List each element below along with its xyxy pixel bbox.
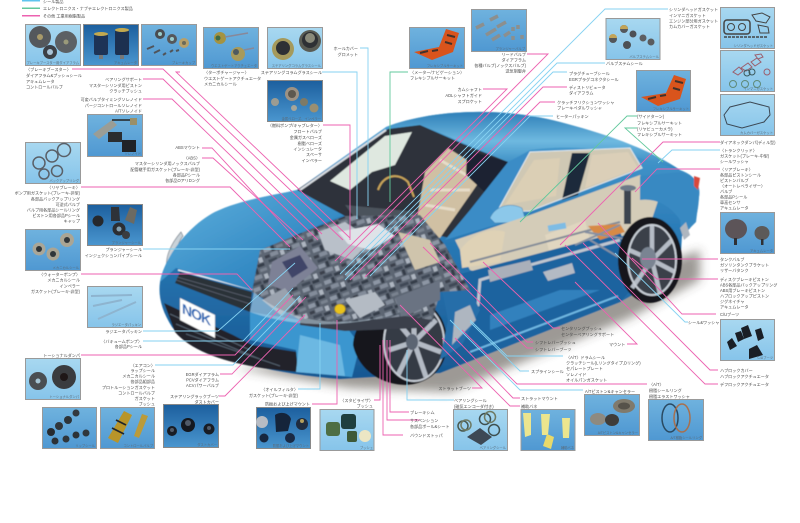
labels: bottom centre: 樹脂シールリング: [649, 387, 682, 393]
lower black bumper: [164, 303, 300, 372]
photo: steering column seal: ステアリングコラムグラスシール: [272, 63, 322, 68]
labels: top left: 〈ブレーキブースター〉: [26, 66, 71, 72]
labels: lower middle: シフトレバーブーツ: [535, 346, 572, 352]
photo: fuel pump bellows: [268, 80, 322, 122]
a-pillar: [445, 151, 530, 240]
labels: upper right: (リヤビューカメラ): [637, 126, 673, 132]
labels: bottom centre: バウンドストッパ: [410, 432, 443, 438]
photo: cam cover gasket: カムカバーガスケット: [740, 130, 773, 135]
labels: upper right: シリンダヘッドガスケット: [669, 6, 718, 12]
photo: bearing seal: [454, 410, 508, 450]
labels: upper right: シールワッシャ: [720, 159, 749, 164]
labels: bottom left: プロトルーションガスケット: [102, 384, 155, 390]
photo: wastegate actuator: ウエストゲートアクチュエータ: [211, 63, 257, 68]
labels: left column: 〈バキュームポンプ〉: [101, 338, 142, 344]
photo: meter flexible circuit: フレキシブルサーキット: [427, 63, 463, 68]
labels: upper right: カムカバーガスケット: [669, 23, 710, 29]
photo: AT piston canceller: A/Tピストン&キャンセラー: [598, 430, 638, 435]
photo: valve stem seal: バルブステムシール: [629, 54, 660, 59]
labels: upper right: 〈リアブレーキ〉: [720, 166, 753, 172]
photo: backup rings: バックアップリング: [49, 178, 80, 183]
labels: upper right: ディストリビュータ: [569, 84, 606, 90]
labels: bottom left: ステアリングラックブーツ: [170, 393, 219, 399]
grille: [175, 272, 252, 312]
photo: CV boots: C/Uブーツ: [757, 355, 773, 360]
labels: bottom left: 〈スタビライザ〉: [340, 397, 373, 403]
labels: left column: 可逆式バルブ: [55, 201, 80, 207]
labels: top centre: カムシャフト: [457, 87, 482, 92]
labels: lower middle: ソレノイド: [566, 372, 586, 377]
labels: left column: ポンプ用ガスケット(ブレーキ-非型): [15, 190, 81, 196]
photo: valve stem seal: [606, 18, 660, 60]
labels: ABS: 各部品Pシール: [173, 172, 200, 178]
door mirror: [490, 205, 526, 223]
photo: accumulator: [84, 24, 138, 66]
labels: bottom centre: ストラットマウント: [521, 395, 558, 401]
labels: left column: バルブ用各部品シールリング: [27, 206, 80, 212]
labels: upper right: ダイアフラム: [569, 90, 593, 96]
labels: upper right: EGRプラグコネクタシール: [569, 76, 619, 82]
photo: cylinder head gasket: シリンダヘッドガスケット: [733, 43, 773, 48]
labels: upper right: (サイドターン): [637, 113, 665, 119]
labels: left column: キャップ: [64, 218, 81, 224]
labels: left column: 各部品Pシール: [115, 343, 142, 349]
labels: top left: パージコントロールソレノイド: [85, 103, 142, 108]
labels: bottom left: ガスケット(ブレーキ-非型): [249, 392, 299, 398]
labels: upper right: フレキシブルサーキット: [637, 120, 682, 126]
labels: ABS: 配管継手用ガスケット(ブレーキ-非型): [130, 166, 201, 172]
labels: lower right: [688, 256, 777, 387]
photo: accumulator: アキュムレータ: [114, 60, 137, 65]
labels: bottom centre: (磁気エンコーダ付き): [454, 403, 494, 409]
photo: plunger tube seal: プランジャーシール: [112, 240, 142, 245]
labels: ABS: 各部品OアリDング: [165, 177, 200, 183]
labels: top centre: ダイアフラム: [502, 56, 526, 62]
windshield and cabin: [297, 125, 508, 238]
photo: flexible circuit: フレキシブルサーキット: [653, 106, 689, 111]
labels: upper right: ガスケット(ブレーキ-中型): [720, 152, 770, 158]
labels: bottom left: メカニカルシール: [122, 374, 155, 378]
photo: brake cups: ブレーキカップ: [172, 60, 196, 65]
labels: bottom left: 各部品組部品: [130, 378, 155, 384]
labels: upper right: プラグチューブシール: [569, 70, 610, 76]
photo: AT resin seal rings: A/T樹脂シールリング: [670, 435, 703, 440]
labels: upper right: クラッチフリクションワッシャ: [557, 99, 614, 105]
photo: CV boots: [720, 320, 774, 360]
photo: dust cover: [164, 404, 218, 448]
labels: bottom left: ガスケット: [135, 395, 155, 401]
lower interior: [455, 175, 660, 280]
labels: upper right: バルブステムシール: [606, 60, 643, 66]
labels: lower right: ABS用ブレーキピストン: [720, 287, 765, 293]
labels: upper right: 〈トランクリッド〉: [720, 147, 757, 153]
labels: upper right: [556, 6, 776, 210]
photo: meter flexible circuit: [410, 28, 464, 68]
photo: accumulator right: アキュムレータ: [750, 248, 773, 253]
leader lines: pink: [72, 54, 720, 435]
leader lines: blue: [143, 9, 720, 400]
leader lines: green: [390, 72, 663, 222]
labels: left column: メカニカルシール: [47, 278, 80, 282]
photo: steering column seal: [268, 28, 322, 68]
labels: top centre: フレキシブルサーキット: [410, 74, 455, 80]
photo: torsional damper: トーショナルダンパ: [49, 394, 80, 399]
labels: bottom centre: 補助バネ: [521, 403, 537, 409]
front bumper panel: [250, 312, 360, 377]
photo: plunger valve parts: [472, 10, 526, 52]
labels: lower right: ハブロックアクチュエータ: [720, 373, 769, 379]
labels: left column: ガスケット(ブレーキ-非型): [31, 288, 81, 294]
front wheel arch / firewall panel: [440, 280, 480, 360]
labels: left column: インペラー: [60, 282, 80, 288]
labels: ABS: [130, 144, 201, 183]
labels: lower right: シール&ワッシャ: [688, 320, 719, 325]
labels: bottom centre: 〈A/T〉: [649, 382, 664, 387]
labels: bottom centre: サスペンション: [410, 417, 438, 423]
photo: control valve: [100, 408, 154, 448]
labels: bottom left: EGRダイアフラム: [186, 371, 219, 377]
labels: upper right: ピストンバルブ: [720, 177, 749, 183]
labels: upper right: ダイアネックダンパ(ディル型): [720, 139, 776, 145]
labels: lower middle: クラッチシール(Lリングタイプ,Dリング): [566, 360, 641, 366]
photo: backup rings: [26, 142, 80, 184]
labels: top centre: ホールカバー: [334, 46, 358, 51]
labels: upper right: ブレーキペダルワッシャ: [557, 104, 602, 110]
labels: bottom centre: 各部品ボール&シート: [410, 423, 450, 429]
photo: bump spring: 補助バネ: [561, 445, 575, 450]
labels: bottom left: ダストカバー: [194, 398, 219, 404]
labels: bottom left: ラップシール: [130, 367, 155, 373]
ground shadow: [235, 250, 700, 392]
labels: bottom centre: ブレーキシム: [410, 409, 435, 415]
door window: [497, 148, 642, 212]
labels: bottom left: [102, 363, 373, 408]
labels: bottom left: コントロールバルブ: [118, 390, 155, 396]
labels: top left: アキュムレータ: [26, 78, 55, 84]
labels: lower right: ハブロックカバー: [720, 367, 753, 373]
labels: top left: ウエストゲートアクチュエータ: [204, 75, 261, 81]
labels: lower middle: マウント: [609, 341, 625, 347]
photo: cylinder head gasket: [720, 8, 774, 48]
photo: engine mount: [256, 408, 310, 448]
labels: top left: ダイアフラム&プッシュシール: [26, 72, 82, 78]
photo: bush: [320, 410, 374, 450]
labels: upper right: 車高センサ: [720, 199, 740, 205]
labels: top centre: スペーサ: [306, 151, 322, 157]
front seats: [415, 148, 486, 238]
labels: left column: 〈リヤブレーキ〉: [47, 184, 80, 190]
labels: left column: プランジャーシール: [105, 246, 142, 252]
labels: bottom left: 〈オイルフィルタ〉: [261, 386, 298, 392]
exhaust system: [455, 222, 620, 312]
labels: top left: ベアリングサポート: [105, 76, 142, 82]
labels: lower middle: [531, 325, 641, 382]
labels: top centre: フロートバルブ: [293, 128, 322, 134]
labels: upper right: 各部品ピストンシール: [720, 172, 761, 178]
labels: lower right: C/Uブーツ: [720, 311, 739, 317]
labels: bottom left: ブッシュ: [357, 402, 373, 408]
photo: AT piston canceller: [584, 394, 640, 436]
labels: top centre: 〈燃料ポンプ/キャブレター〉: [268, 122, 322, 128]
labels: top left: コントロールバルブ: [26, 84, 63, 90]
car body: [160, 112, 699, 379]
labels: lower middle: センターベアリングサポート: [561, 331, 614, 337]
labels: top centre: 各種バルブ(ノックスバルブ): [474, 62, 527, 68]
labels: top centre: 樹脂ベローズ: [298, 140, 322, 146]
labels: top centre: ADLシャフトガイド: [445, 92, 482, 98]
rear wheel: [618, 217, 682, 303]
labels: upper right: エンジン部分用ガスケット: [669, 18, 718, 24]
labels: upper right: 各部品Pシール: [720, 194, 747, 200]
labels: top left: A/Tソレノイド: [115, 108, 142, 114]
labels: bottom left: ブッシュ: [139, 400, 155, 406]
labels: top centre: 送気制御弁: [506, 68, 526, 74]
labels: ABS: 〈ABS〉: [184, 156, 200, 160]
labels: left column: ラジエータパッキン: [105, 328, 142, 334]
photo: brake booster diaphragm: ブレーキブースター用ダイアフラム: [26, 60, 80, 65]
labels: lower right: アキュムレータ: [720, 304, 749, 310]
fender swoosh: [250, 292, 405, 324]
engine bay: [252, 215, 470, 331]
photo: torsional damper: [26, 358, 80, 400]
front wheel: [353, 299, 447, 385]
photo: cam cover gasket: [720, 94, 774, 136]
labels: upper right: インマニガスケット: [669, 12, 706, 18]
labels: left column: 各部品バックアップリング: [31, 196, 80, 202]
labels: top left: メカニカルシール: [204, 82, 237, 86]
labels: left column: トーショナルダンパ: [43, 352, 80, 358]
photo: lip seals: リップシール: [75, 443, 96, 448]
labels: top left: 可変バルブタイミングソレノイド: [81, 96, 142, 102]
labels: lower middle: センタリングブッシュ: [561, 325, 602, 331]
labels: lower middle: 〈A/T〉ドラムシール: [566, 354, 605, 360]
photo: dust cover: ダストカバー: [197, 442, 217, 447]
labels: upper right: フレキシブルサーキット: [637, 131, 682, 137]
photo: radiator packing: ラジエータパッキン: [111, 322, 142, 327]
labels: lower right: ディスクブレーキピストン: [720, 276, 769, 282]
labels: left column: ピストン用各部品Pシール: [32, 212, 80, 218]
photo: mechanical seal: メカニカルシール: [53, 265, 80, 270]
legend: [22, 0, 133, 18]
photo: flexible circuit: [636, 70, 690, 112]
photo: bump spring: [521, 410, 575, 450]
labels: ABS: ABSマウント: [175, 144, 200, 150]
labels: left column: 〈ウォーターポンプ〉: [39, 271, 80, 277]
photo: bush: ブッシュ: [360, 445, 373, 450]
labels: top centre: インシュレータ: [293, 146, 322, 152]
labels: upper right: バルブ: [720, 188, 732, 194]
labels: bottom left: PCVダイアフラム: [186, 376, 219, 382]
labels: lower right: デフロックアクチュエータ: [720, 381, 769, 387]
photo: fuel pump bellows: 金属ベローズ、インペラー: [282, 116, 321, 121]
photo: bearing seal: ベアリングシール: [480, 445, 507, 450]
photo: AT resin seal rings: [648, 400, 704, 440]
photo: plunger valve parts: プランジャーバルブ: [496, 46, 526, 51]
labels: lower middle: セパレートプレート: [566, 365, 603, 371]
legend: その他 工業用樹脂製品: [43, 12, 85, 18]
labels: lower middle: シフトレバーブッシュ: [535, 339, 576, 345]
photo: intake manifold gasket: [720, 50, 774, 92]
labels: bottom centre: [410, 382, 690, 438]
labels: bottom centre: ストラットブーツ: [438, 385, 471, 391]
NOK plate: [180, 298, 215, 338]
photo: brake booster diaphragm: [26, 24, 80, 66]
labels: top centre: ステアリングコラムグラスシール: [261, 69, 322, 75]
labels: bottom centre: A/Tピストン&キャンセラー: [585, 388, 635, 394]
photo: plunger tube seal: [88, 204, 142, 246]
labels: upper right: 〈オートレベライザー〉: [720, 182, 765, 188]
photo: solenoid: [88, 114, 142, 156]
labels: lower right: ハブロックアップピストン: [720, 292, 769, 298]
legend: エレクトロニクス・ナブテエレクトロニクス製品: [43, 5, 133, 11]
labels: left column: [15, 184, 142, 358]
labels: upper right: アキュムレータ: [720, 204, 749, 210]
photo: solenoid: ソレノイド: [125, 152, 141, 156]
labels: lower middle: オイルパンガスケット: [566, 376, 607, 382]
labels: top left: マスターシリンダ用ピストン: [89, 82, 142, 88]
photo: lip seals: [42, 408, 96, 448]
rear suspension: [575, 185, 660, 270]
photo: wastegate actuator: [204, 28, 258, 68]
labels: bottom centre: ベアリングシール: [454, 397, 487, 403]
labels: top centre: リードバルブ: [501, 51, 526, 57]
roof: [386, 112, 680, 170]
labels: top left: 〈ターボチャージャー〉: [204, 69, 249, 75]
labels: ABS: マスターシリンダ用ノックスバルブ: [135, 160, 200, 166]
hood: [160, 190, 343, 290]
photo: intake manifold gasket: インマニガスケット: [743, 86, 773, 91]
labels: top left: [26, 66, 261, 114]
labels: lower middle: スプラインシール: [531, 368, 564, 374]
labels: top centre: インペラー: [302, 157, 322, 163]
photo: accumulator right: [720, 212, 774, 254]
headlight: [167, 232, 183, 268]
rear panel: [640, 172, 699, 236]
labels: top centre: 〈メーター/ナビゲーション〉: [410, 69, 464, 75]
side panel: [445, 232, 640, 355]
labels: bottom centre: 樹脂エラストワッシャ: [649, 393, 690, 399]
labels: left column: インジェクションパイプシール: [85, 252, 142, 258]
labels: top centre: グロメット: [338, 51, 358, 57]
photo: mechanical seal: [26, 230, 80, 270]
labels: lower right: ジグネイチャ: [720, 298, 745, 304]
car illustration: [160, 112, 700, 392]
labels: lower right: タンクバルブ: [720, 256, 744, 262]
labels: top centre: スプロケット: [457, 98, 482, 104]
labels: lower right: ABS各部品バックアップリング: [720, 282, 777, 288]
labels: lower right: リザーバタンク: [720, 267, 749, 273]
labels: upper right: ヒーターパッキン: [556, 113, 589, 119]
photo: engine mount: 防振および上げマウント: [273, 443, 309, 448]
photo: radiator packing: [88, 286, 142, 328]
labels: bottom left: 〈エアコン〉: [130, 363, 155, 368]
labels: lower right: ガソリンタンクブラケット: [720, 262, 769, 268]
labels: top centre: [261, 46, 527, 163]
NOK plate: NOK: [182, 302, 211, 330]
photo: control valve: コントロールバルブ: [123, 443, 154, 448]
labels: top left: クラッチブッシュ: [109, 88, 142, 94]
labels: bottom left: ACVパワーバルブ: [186, 382, 219, 388]
photo: brake cups: [142, 24, 196, 66]
labels: bottom left: 防振および上げマウント: [265, 400, 310, 406]
labels: top centre: 金属ガスベローズ: [290, 134, 322, 140]
